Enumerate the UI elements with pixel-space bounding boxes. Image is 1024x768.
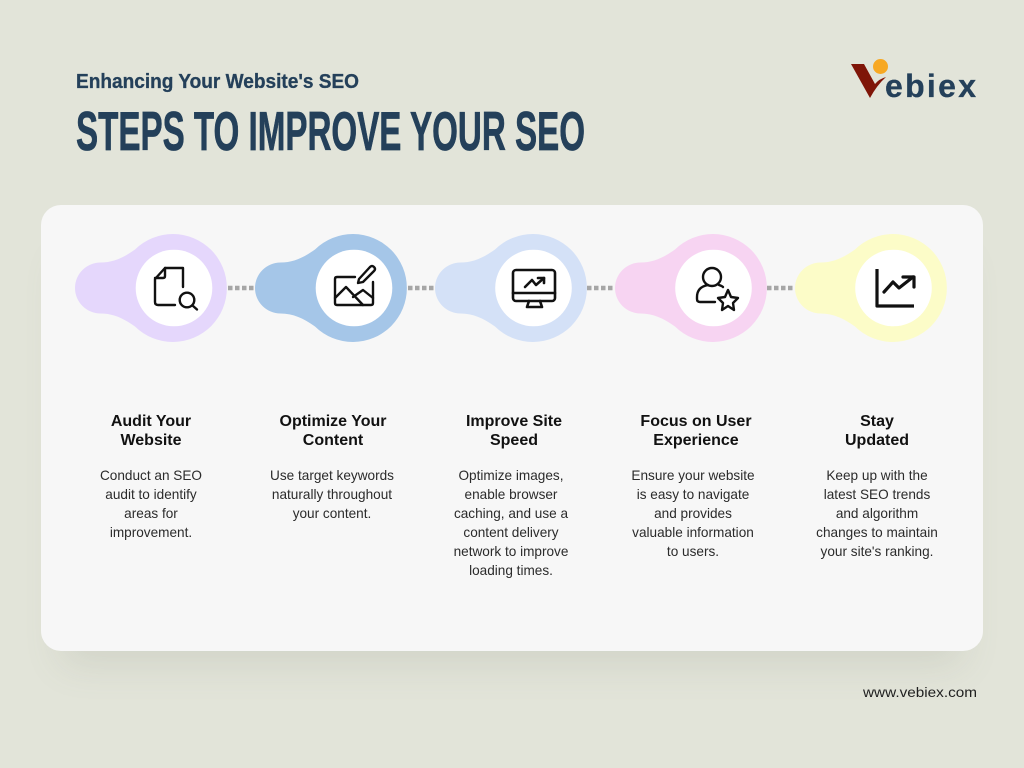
step 1 text: Conduct an SEO xyxy=(100,468,202,483)
step 3 text: Speed xyxy=(490,432,538,449)
step 2 text xyxy=(270,413,394,521)
step 4 text: Focus on User xyxy=(640,413,752,430)
step 5 text: Keep up with the xyxy=(826,468,928,483)
step 3 node: speed icon xyxy=(435,234,587,342)
step 4 text: and provides xyxy=(654,506,732,521)
step 3 text: loading times. xyxy=(469,563,553,578)
icon: monitor with trend xyxy=(513,270,555,307)
step 4 node: user experience icon xyxy=(615,234,767,342)
website url: www.vebiex.com xyxy=(862,685,977,700)
logo: Vebiex: ebiex xyxy=(885,68,976,104)
step 4 text: Experience xyxy=(653,432,739,449)
step 5 text xyxy=(816,413,938,559)
icon: image with pencil xyxy=(335,266,375,305)
step 2 text: Optimize Your xyxy=(280,413,386,430)
step 5 text: and algorithm xyxy=(836,506,918,521)
step 5 node: stay updated icon xyxy=(795,234,947,342)
icon: user with star xyxy=(697,268,738,310)
step 1 text: improvement. xyxy=(110,525,192,540)
step 1 text: audit to identify xyxy=(105,487,197,502)
step 4 text: valuable information xyxy=(632,525,754,540)
step 5 text: Stay xyxy=(860,413,894,430)
step 2 text: Content xyxy=(303,432,364,449)
step 1 text xyxy=(100,413,202,540)
step 3 text: content delivery xyxy=(463,525,559,540)
step 1 text: Audit Your xyxy=(111,413,191,430)
step 4 text xyxy=(631,413,755,559)
step 3 text: Optimize images, xyxy=(458,468,564,483)
step 3 text: caching, and use a xyxy=(454,506,568,521)
step 2 text: naturally throughout xyxy=(272,487,392,502)
step 5 text: latest SEO trends xyxy=(824,487,930,502)
title: STEPS TO IMPROVE YOUR SEO xyxy=(76,101,585,162)
step 5 text: changes to maintain xyxy=(816,525,938,540)
icon: rising chart xyxy=(877,269,914,306)
step 4 text: is easy to navigate xyxy=(637,487,749,502)
subtitle: Enhancing Your Website's SEO xyxy=(76,71,359,93)
step 2 node: content icon xyxy=(255,234,407,342)
step 2 text: your content. xyxy=(293,506,371,521)
panel: steps card xyxy=(41,205,983,651)
step 3 text xyxy=(454,413,568,578)
step 3 text: enable browser xyxy=(465,487,558,502)
step 4 text: Ensure your website xyxy=(631,468,755,483)
step 3 text: network to improve xyxy=(454,544,568,559)
icon: document with magnifier xyxy=(155,268,197,310)
step 3 text: Improve Site xyxy=(466,413,562,430)
connector dots xyxy=(228,286,794,290)
logo: Vebiex xyxy=(851,59,976,104)
step 5 text: Updated xyxy=(845,432,909,449)
step 1 text: areas for xyxy=(124,506,178,521)
step 4 text: to users. xyxy=(667,544,719,559)
step 2 text: Use target keywords xyxy=(270,468,394,483)
step 1 node: audit icon xyxy=(75,234,227,342)
step 1 text: Website xyxy=(120,432,182,449)
step 5 text: your site's ranking. xyxy=(821,544,933,559)
